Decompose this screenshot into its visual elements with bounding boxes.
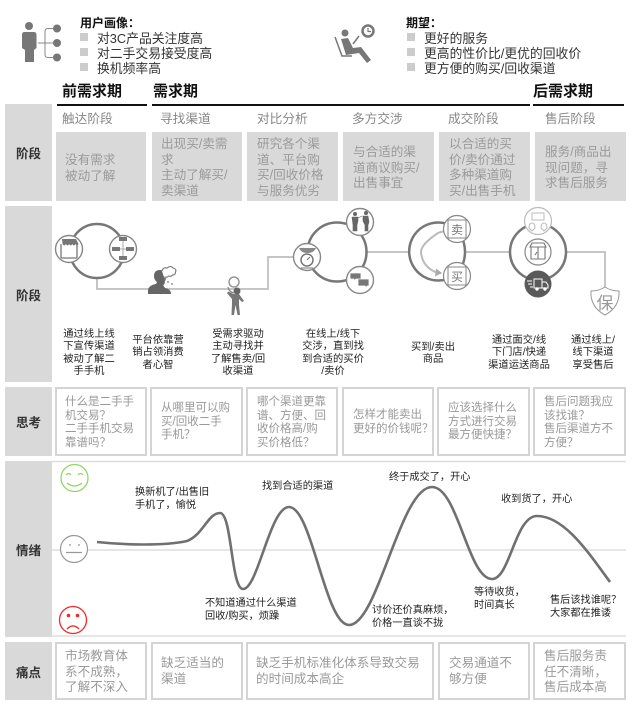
icon: person searching xyxy=(227,277,244,315)
thinking card 6 xyxy=(533,387,626,456)
emotion note: new phone: 换新机了/出售旧 xyxy=(135,487,209,498)
stage card 4 xyxy=(343,132,434,201)
stage card 5 xyxy=(439,132,530,201)
stage name 3: 对比分析 xyxy=(257,112,308,126)
pain card 1: 系不成熟， xyxy=(65,664,128,678)
journey caption 3: 收渠道 xyxy=(223,366,253,377)
node: compare ring xyxy=(294,208,374,294)
journey caption 6: 通过面交/线 xyxy=(492,335,546,346)
node: deal ring: 卖 xyxy=(451,223,463,237)
stage card 5: 买/出售手机 xyxy=(449,184,515,198)
emotion note: after-sales: 大家都在推诿 xyxy=(550,608,611,619)
pain card 1: 市场教育体 xyxy=(65,649,128,663)
journey caption 7: 线下渠道 xyxy=(572,347,614,358)
stage card 6 xyxy=(535,132,626,201)
journey caption 3: 受需求驱动 xyxy=(212,329,264,340)
row label: emotion: 情绪 xyxy=(16,544,41,558)
journey caption 2: 平台依靠营 xyxy=(132,335,184,346)
stage card 2: 出现买/卖需 xyxy=(161,137,227,151)
pain card 3: 的时间成本高企 xyxy=(256,672,344,686)
row label: pain points: 痛点 xyxy=(16,666,41,680)
emotion note: waiting: 等待收货， xyxy=(474,587,525,598)
emotion note: goods received: 收到货了，开心 xyxy=(501,494,572,505)
row label: stage xyxy=(5,104,52,201)
journey caption 6 xyxy=(488,334,550,371)
stage card 2: 卖渠道 xyxy=(161,184,199,198)
user profile list: 换机频率高 xyxy=(97,61,161,76)
thinking card 5: 应该选择什么 xyxy=(448,402,517,414)
emotion note: which channel: 不知道通过什么渠道 xyxy=(205,598,297,609)
emotion note: after-sales xyxy=(550,594,621,619)
icon: warranty shield xyxy=(591,287,619,315)
stage card 2 xyxy=(152,132,242,201)
stage card 5: 多种渠道购 xyxy=(449,168,512,182)
phase: pre-demand: 前需求期 xyxy=(62,83,122,100)
journey connector line xyxy=(97,252,605,289)
emotion frame lines xyxy=(52,462,626,636)
journey caption 2: 销占领消费 xyxy=(132,347,184,358)
pain card 2: 渠道 xyxy=(161,672,186,686)
stage card 3: 与服务优劣 xyxy=(257,184,320,198)
user profile list xyxy=(80,31,212,76)
row label: pain points xyxy=(5,642,52,700)
phase rule: demand xyxy=(152,104,530,106)
stage card 4: 道商议购买/ xyxy=(353,160,419,174)
thinking card 6: 售后渠道方不 xyxy=(544,423,613,435)
thinking card 4: 怎样才能卖出 xyxy=(353,409,422,421)
stage name 5: 成交阶段 xyxy=(448,112,499,126)
stage card 5: 价/卖价通过 xyxy=(449,152,515,166)
icon: thinking head xyxy=(148,266,176,294)
pain card 3: 缺乏手机标准化体系导致交易 xyxy=(256,656,420,670)
thinking card 1 xyxy=(55,387,147,456)
thinking card 4: 更好的价钱呢？ xyxy=(353,423,434,435)
journey caption 2 xyxy=(132,334,184,371)
emotion note: waiting xyxy=(474,586,525,611)
emotion note: right channel: 找到合适的渠道 xyxy=(262,481,333,492)
journey caption 3: 了解售卖/回 xyxy=(211,354,265,365)
pain card 2 xyxy=(151,642,243,700)
journey caption 1: 通过线上线 xyxy=(63,329,115,340)
journey caption 5 xyxy=(411,341,455,365)
thinking card 3: 哪个渠道更靠 xyxy=(257,396,326,408)
emotion note: haggling: 讨价还价真麻烦， xyxy=(372,605,454,616)
journey caption 4: /卖价 xyxy=(321,366,345,377)
stage card 6: 求售后服务 xyxy=(545,176,608,190)
thinking card 5: 最方便快捷？ xyxy=(448,429,517,441)
thinking card 3 xyxy=(246,387,338,456)
journey caption 4: 交涉，直到找 xyxy=(302,341,364,352)
pain card 5: 售后成本高 xyxy=(544,680,607,694)
stage card 1: 没有需求 xyxy=(65,153,115,167)
stage card 6: 服务/商品出 xyxy=(545,145,611,159)
stage card 3: 道、平台购 xyxy=(257,152,320,166)
thinking card 5 xyxy=(437,387,530,456)
emotion note: after-sales: 售后该找谁呢？ xyxy=(550,595,621,606)
heading: expectations: 期望： xyxy=(406,16,442,30)
emotion note: deal done: 终于成交了，开心 xyxy=(389,472,470,483)
row label: thinking: 思考 xyxy=(16,416,41,430)
row label: emotion xyxy=(5,461,52,637)
journey caption 4: 在线上/线下 xyxy=(306,329,360,340)
row label: stage: 阶段 xyxy=(16,147,41,161)
journey caption 3: 主动寻找并 xyxy=(212,341,264,352)
pain card 4 xyxy=(438,642,530,700)
stage card 5: 以合适的买 xyxy=(449,137,512,151)
journey caption 5: 商品 xyxy=(423,354,443,365)
face: neutral xyxy=(60,536,88,562)
thinking card 2: 从哪里可以购 xyxy=(161,402,230,414)
phase rule: pre-demand xyxy=(57,104,147,106)
stage card 4: 出售事宜 xyxy=(353,176,403,190)
stage card 4: 与合适的渠 xyxy=(353,145,416,159)
thinking card 1: 靠谱吗？ xyxy=(65,437,111,449)
row label: stage journey: 阶段 xyxy=(16,288,41,302)
stage card 1 xyxy=(56,132,146,201)
emotion note: waiting: 时间真长 xyxy=(474,600,515,611)
stage card 2: 求 xyxy=(161,152,174,166)
stage card 6: 现问题，寻 xyxy=(545,160,608,174)
emotion curve xyxy=(97,487,610,625)
pain card 1 xyxy=(55,642,147,700)
journey caption 7 xyxy=(571,334,615,371)
thinking card 6: 方便？ xyxy=(544,437,578,449)
thinking card 1: 什么是二手手 xyxy=(65,396,134,408)
thinking card 2: 买/回收二手 xyxy=(161,416,222,428)
face: happy xyxy=(61,464,88,492)
pain card 5: 售后服务责 xyxy=(544,649,607,663)
thinking card 2 xyxy=(150,387,243,456)
stage card 1: 被动了解 xyxy=(65,168,115,182)
journey caption 4: 到合适的买价 xyxy=(302,354,364,365)
pain card 3 xyxy=(246,642,434,700)
stage card 3: 买/回收价格 xyxy=(257,168,323,182)
row label: stage journey xyxy=(5,206,52,382)
phase: post-demand: 后需求期 xyxy=(533,83,593,100)
thinking card 3: 买价格低？ xyxy=(257,437,314,449)
node: reach ring xyxy=(56,224,136,278)
phase: demand: 需求期 xyxy=(153,83,198,100)
stage card 3 xyxy=(247,132,338,201)
thinking card 2: 手机？ xyxy=(161,429,196,441)
emotion note: haggling: 价格一直谈不拢 xyxy=(372,618,443,629)
thinking card 1: 二手手机交易 xyxy=(65,423,134,435)
pain card 4: 够方便 xyxy=(449,672,487,686)
phase rule: post-demand xyxy=(533,104,624,106)
journey diagram xyxy=(54,206,620,316)
journey caption 5: 买到/卖出 xyxy=(411,342,455,353)
icon: person on chair with clock xyxy=(334,24,375,63)
heading: user profile: 用户画像： xyxy=(80,16,140,30)
journey caption 6: 下门店/快递 xyxy=(492,347,546,358)
journey caption 1: 被动了解二 xyxy=(63,354,115,365)
row label: thinking xyxy=(5,387,52,456)
pain card 1: 了解不深入 xyxy=(65,680,128,694)
pain card 2: 缺乏适当的 xyxy=(161,656,224,670)
stage name 2: 寻找渠道 xyxy=(160,112,211,126)
thinking card 4 xyxy=(342,387,434,456)
stage name 6: 售后阶段 xyxy=(545,112,596,126)
pain card 4: 交易通道不 xyxy=(449,656,512,670)
expectations list: 更高的性价比/更优的回收价 xyxy=(424,46,581,61)
journey caption 6: 渠道运送商品 xyxy=(488,360,550,371)
expectations list xyxy=(407,31,581,76)
stage name 1: 触达阶段 xyxy=(62,112,113,126)
thinking card 6: 该找谁？ xyxy=(544,410,590,422)
thinking card 1: 机交易？ xyxy=(65,410,111,422)
thinking card 6: 售后问题我应 xyxy=(544,396,613,408)
stage card 2: 主动了解买/ xyxy=(161,168,227,182)
emotion note: which channel: 回收/购买，烦躁 xyxy=(205,611,279,622)
emotion note: which channel xyxy=(205,597,297,622)
expectations list: 更好的服务 xyxy=(424,31,488,46)
user profile list: 对3C产品关注度高 xyxy=(97,31,203,46)
node: deal ring xyxy=(409,216,470,290)
journey caption 1: 下宣传渠道 xyxy=(63,341,115,352)
node: delivery ring xyxy=(510,208,566,298)
icon: warranty shield: 保 xyxy=(596,294,614,313)
emotion note: new phone xyxy=(135,486,209,511)
thinking card 3: 谱、方便、回 xyxy=(257,410,326,422)
emotion note: haggling xyxy=(372,604,454,629)
stage card 3: 研究各个渠 xyxy=(257,137,320,151)
face: sad xyxy=(60,606,86,634)
journey caption 7: 通过线上/ xyxy=(571,335,615,346)
node: deal ring: 买 xyxy=(451,270,463,284)
journey caption 7: 享受售后 xyxy=(572,360,614,371)
journey caption 2: 者心智 xyxy=(143,360,173,371)
stage name 4: 多方交涉 xyxy=(352,112,403,126)
thinking card 5: 方式进行交易 xyxy=(448,416,517,428)
user profile list: 对二手交易接受度高 xyxy=(97,46,212,61)
expectations list: 更方便的购买/回收渠道 xyxy=(424,61,556,76)
journey caption 3 xyxy=(211,328,265,377)
journey caption 1 xyxy=(63,328,115,377)
thinking card 3: 收价格高/购 xyxy=(257,423,318,435)
emotion note: new phone: 手机了，愉悦 xyxy=(135,500,196,511)
pain card 5: 任不清晰， xyxy=(544,664,607,678)
pain card 5 xyxy=(533,642,626,700)
journey caption 1: 手手机 xyxy=(74,366,104,377)
journey caption 4 xyxy=(302,328,364,377)
icon: user profile xyxy=(22,22,61,62)
